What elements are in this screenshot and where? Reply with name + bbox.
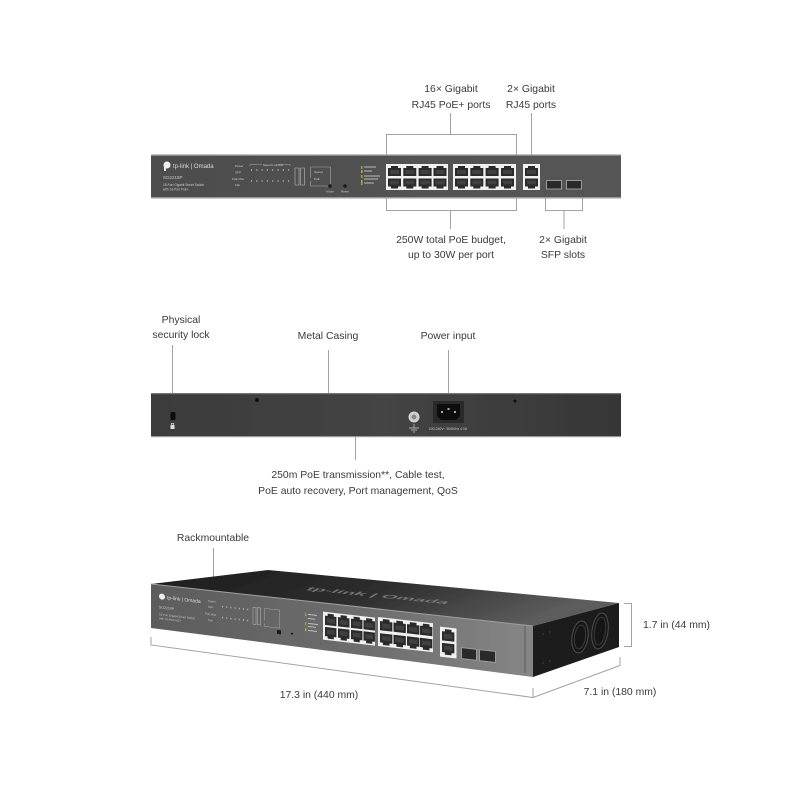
logo and model: tp-link | Omada: [167, 595, 201, 605]
label: 16x Gigabit RJ45 PoE+ ports: 16× Gigabit: [424, 84, 478, 95]
callout line: rackmountable: [212, 548, 214, 577]
power socket: 100-240V~ 50/60Hz 4.0A: [429, 427, 468, 431]
16 PoE ports: [323, 611, 433, 652]
label: 2x Gigabit SFP slots: [539, 235, 587, 261]
2 RJ45 ports: [440, 627, 456, 658]
LEDs: [205, 599, 280, 630]
status LED panel: Power: [235, 164, 244, 168]
model text: SG2218P: [163, 175, 183, 180]
status LED panel: Speed Link/Act: [263, 163, 283, 167]
panel: front view of switch: [151, 154, 621, 198]
dimension: width bracket: [151, 637, 533, 698]
buttons: mode and reset: [326, 184, 349, 194]
model text: 18-Port Gigabit Smart Switch: [163, 183, 204, 187]
side face with vents: [533, 603, 619, 677]
status LED panel: SFP: [235, 170, 241, 174]
label: 2x Gigabit SFP slots: SFP slots: [541, 250, 585, 261]
label: PoE features: 250m PoE transmission**, Cable test,: [271, 470, 445, 481]
label: 2x Gigabit SFP slots: 2× Gigabit: [539, 235, 587, 246]
callout bracket: PoE ports: [386, 113, 516, 229]
front panel details: [159, 592, 496, 663]
buttons: [277, 630, 293, 636]
ports: 2 RJ45: [523, 164, 540, 190]
logo: tp-link Omada: [164, 162, 214, 171]
label: physical security lock: Physical: [162, 315, 200, 326]
logo and model: with 16-Port PoE+: [159, 616, 182, 623]
LED legend: [305, 613, 318, 633]
model text: with 16-Port PoE+: [163, 188, 189, 192]
status LED panel: Fan: [235, 183, 241, 187]
callout line: RJ45 ports: [530, 113, 532, 155]
logo and model: [159, 593, 201, 625]
panel: rear view of switch: [151, 393, 621, 437]
label: physical security lock: security lock: [152, 330, 210, 341]
label: metal casing: Metal Casing: [298, 331, 359, 342]
status LED panel: [232, 163, 330, 187]
LEDs: Power: [208, 599, 216, 604]
label: 16x Gigabit RJ45 PoE+ ports: [412, 84, 490, 111]
2 SFP slots: [461, 647, 496, 663]
panel: perspective view of switch: [151, 570, 619, 677]
label: 16x Gigabit RJ45 PoE+ ports: RJ45 PoE+ ports: [412, 100, 490, 111]
label: 250W total PoE budget: [396, 235, 506, 261]
logo: tp-link Omada: tp-link | Omada: [173, 164, 214, 170]
icon: grounding screw: [408, 412, 420, 432]
dimension: height bracket: [624, 604, 632, 646]
label: 2x Gigabit RJ45 ports: RJ45 ports: [506, 100, 556, 111]
label: PoE features: [258, 470, 458, 497]
top face: tp-link | Omada: [303, 586, 453, 605]
model text: [163, 175, 204, 192]
status LED panel: PoE Max: [232, 177, 245, 181]
buttons: mode and reset: Mode: [326, 190, 334, 194]
label: 2x Gigabit RJ45 ports: [506, 84, 556, 111]
status LED panel: Speed: [314, 170, 323, 174]
ports: 2 SFP: [546, 180, 582, 190]
power socket: [429, 401, 468, 431]
callout bracket: SFP slots: [546, 198, 582, 229]
screws: [255, 398, 516, 402]
label: height: 1.7 in (44 mm): [643, 620, 710, 631]
label: power input: Power input: [421, 331, 476, 342]
status LED panel: PoE: [314, 177, 320, 181]
label: 250W total PoE budget: 250W total PoE budget,: [396, 235, 506, 246]
top face: [151, 570, 619, 626]
dimension: depth bracket: [533, 657, 620, 698]
logo and model: SG2218P: [159, 605, 175, 611]
label: 2x Gigabit RJ45 ports: 2× Gigabit: [507, 84, 555, 95]
label: width: 17.3 in (440 mm): [280, 690, 358, 701]
LEDs: Fan: [208, 618, 213, 623]
buttons: mode and reset: Reset: [341, 190, 349, 194]
callout lines: rear view: [172, 345, 448, 460]
label: rackmountable: Rackmountable: [177, 533, 249, 544]
label: physical security lock: [152, 315, 210, 341]
LEDs: SFP: [208, 605, 214, 610]
LEDs: PoE Max: [205, 612, 217, 617]
icon: security lock slot: [170, 412, 176, 429]
LED legend: [361, 166, 380, 185]
ports: 16 RJ45 PoE+: [386, 164, 516, 190]
label: 250W total PoE budget: up to 30W per port: [408, 250, 494, 261]
front face: [151, 584, 533, 677]
label: PoE features: PoE auto recovery, Port management, QoS: [258, 486, 458, 497]
label: depth: 7.1 in (180 mm): [584, 687, 656, 698]
logo and model: 18-Port Gigabit Smart Switch: [159, 612, 195, 620]
